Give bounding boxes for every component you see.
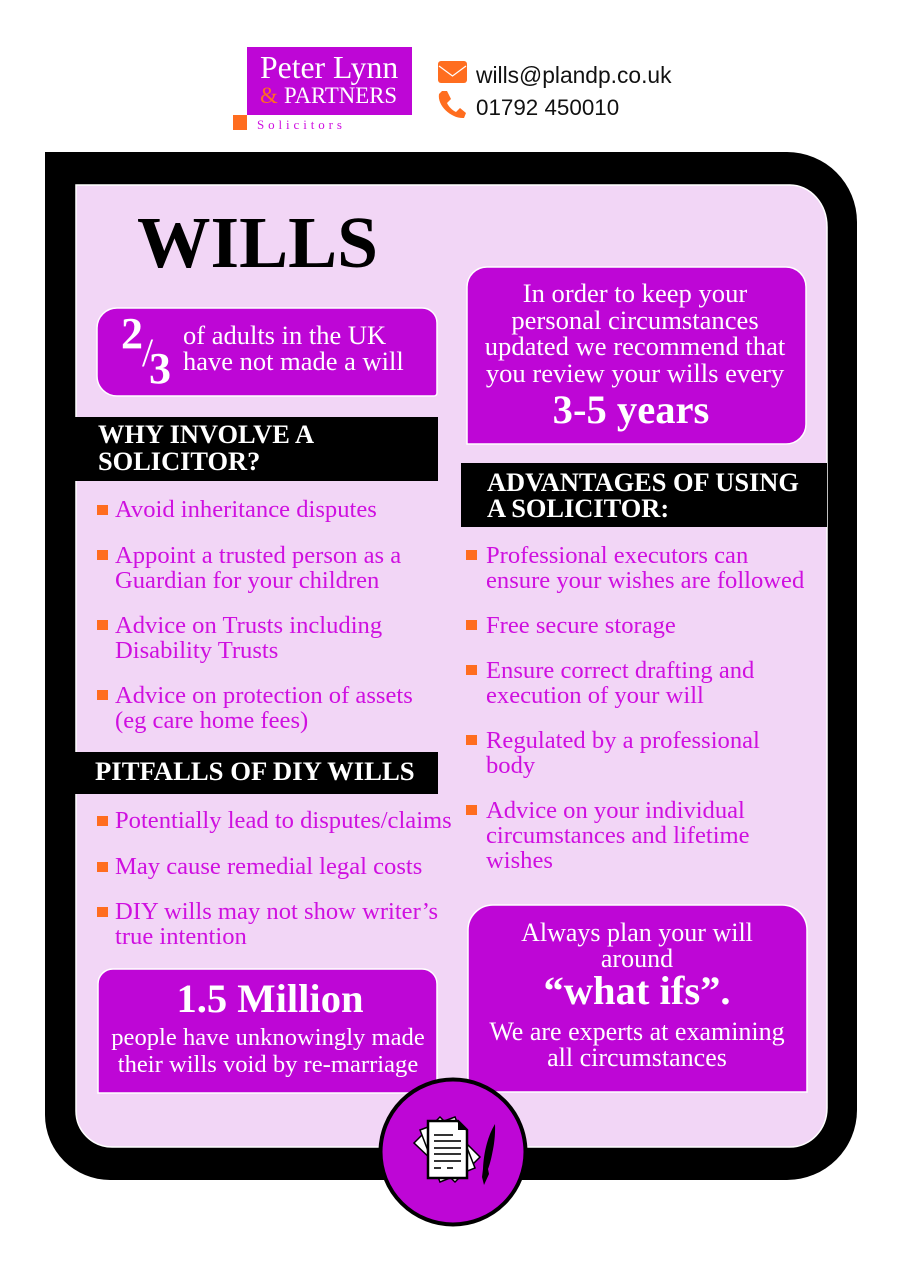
logo: Solicitors bbox=[257, 117, 346, 132]
logo: Peter Lynn bbox=[260, 50, 398, 85]
icon: quill bbox=[482, 1124, 495, 1185]
callout: what ifs: We are experts at examining bbox=[489, 1017, 785, 1046]
logo: & bbox=[260, 83, 278, 108]
logo bbox=[233, 47, 412, 132]
list: why involve a solicitor: (eg care home fees) bbox=[115, 707, 308, 734]
callout: what ifs: “what ifs”. bbox=[543, 968, 731, 1013]
list: advantages: body bbox=[486, 752, 536, 779]
list: pitfalls: DIY wills may not show writer’s bbox=[115, 898, 438, 925]
callout: review wills: In order to keep your bbox=[523, 278, 747, 308]
callout: review wills: 3-5 years bbox=[553, 387, 709, 432]
heading: advantages of using a solicitor: A SOLICITOR: bbox=[487, 493, 669, 523]
callout: review wills: personal circumstances bbox=[511, 305, 759, 335]
list: advantages: Ensure correct drafting and bbox=[486, 657, 754, 684]
list: why involve a solicitor: Guardian for your children bbox=[115, 567, 379, 594]
callout: review wills bbox=[467, 267, 806, 444]
list: advantages: circumstances and lifetime bbox=[486, 822, 750, 849]
callout: two thirds: 2 bbox=[121, 309, 143, 358]
callout: 1.5 million: people have unknowingly made bbox=[111, 1024, 425, 1051]
list: advantages: Regulated by a professional bbox=[486, 727, 760, 754]
callout: two thirds: / bbox=[142, 330, 154, 375]
icon: phone bbox=[439, 91, 466, 118]
list: pitfalls: Potentially lead to disputes/claims bbox=[115, 807, 452, 834]
list: why involve a solicitor: Disability Trusts bbox=[115, 637, 278, 664]
list: why involve a solicitor: Appoint a trusted person as a bbox=[115, 542, 401, 569]
heading: pitfalls of DIY wills: PITFALLS OF DIY WILLS bbox=[95, 756, 415, 786]
heading: why involve a solicitor bbox=[45, 417, 438, 481]
heading: pitfalls of DIY wills bbox=[45, 752, 438, 794]
heading: why involve a solicitor: SOLICITOR? bbox=[98, 446, 260, 476]
list: pitfalls: May cause remedial legal costs bbox=[115, 853, 422, 880]
list: advantages: ensure your wishes are followed bbox=[486, 567, 804, 594]
logo: PARTNERS bbox=[284, 83, 397, 108]
callout: review wills: you review your wills every bbox=[486, 358, 785, 388]
title: WILLS bbox=[137, 202, 378, 283]
heading: advantages of using a solicitor bbox=[461, 463, 827, 527]
phone number: 01792 450010 bbox=[476, 95, 619, 120]
callout: two thirds: 3 bbox=[149, 344, 171, 393]
list: why involve a solicitor: Advice on Trusts including bbox=[115, 612, 382, 639]
panel: lilac background bbox=[76, 185, 827, 1147]
list: pitfalls: true intention bbox=[115, 923, 247, 950]
email address: wills@plandp.co.uk bbox=[475, 62, 672, 88]
icon: documents bbox=[414, 1117, 480, 1182]
list: why involve a solicitor: Advice on protection of assets bbox=[115, 682, 413, 709]
callout: two thirds: have not made a will bbox=[183, 346, 404, 376]
callout: review wills: updated we recommend that bbox=[485, 331, 786, 361]
icon badge: documents and quill bbox=[380, 1080, 526, 1224]
list: advantages: Professional executors can bbox=[486, 542, 748, 569]
callout: what ifs: Always plan your will bbox=[521, 918, 753, 947]
list: advantages: execution of your will bbox=[486, 682, 704, 709]
list: advantages bbox=[466, 542, 804, 874]
callout: two thirds bbox=[97, 308, 437, 396]
callout: 1.5 million: their wills void by re-marriage bbox=[118, 1051, 418, 1078]
callout: what ifs: around bbox=[601, 944, 673, 973]
list: advantages: Free secure storage bbox=[486, 612, 676, 639]
list: why involve a solicitor: Avoid inheritance disputes bbox=[115, 496, 377, 523]
list: advantages: Advice on your individual bbox=[486, 797, 745, 824]
panel: black frame bbox=[45, 152, 857, 1180]
list: why involve a solicitor bbox=[97, 496, 413, 734]
heading: advantages of using a solicitor: ADVANTAGES OF USING bbox=[487, 467, 799, 497]
callout: 1.5 million bbox=[98, 969, 437, 1093]
callout: what ifs bbox=[468, 905, 807, 1092]
list: advantages: wishes bbox=[486, 847, 553, 874]
icon: envelope bbox=[438, 61, 467, 83]
callout: 1.5 million: 1.5 Million bbox=[176, 976, 364, 1021]
heading: why involve a solicitor: WHY INVOLVE A bbox=[98, 419, 314, 449]
callout: two thirds: of adults in the UK bbox=[183, 320, 386, 350]
callout: what ifs: all circumstances bbox=[547, 1043, 727, 1072]
list: pitfalls bbox=[97, 807, 452, 950]
